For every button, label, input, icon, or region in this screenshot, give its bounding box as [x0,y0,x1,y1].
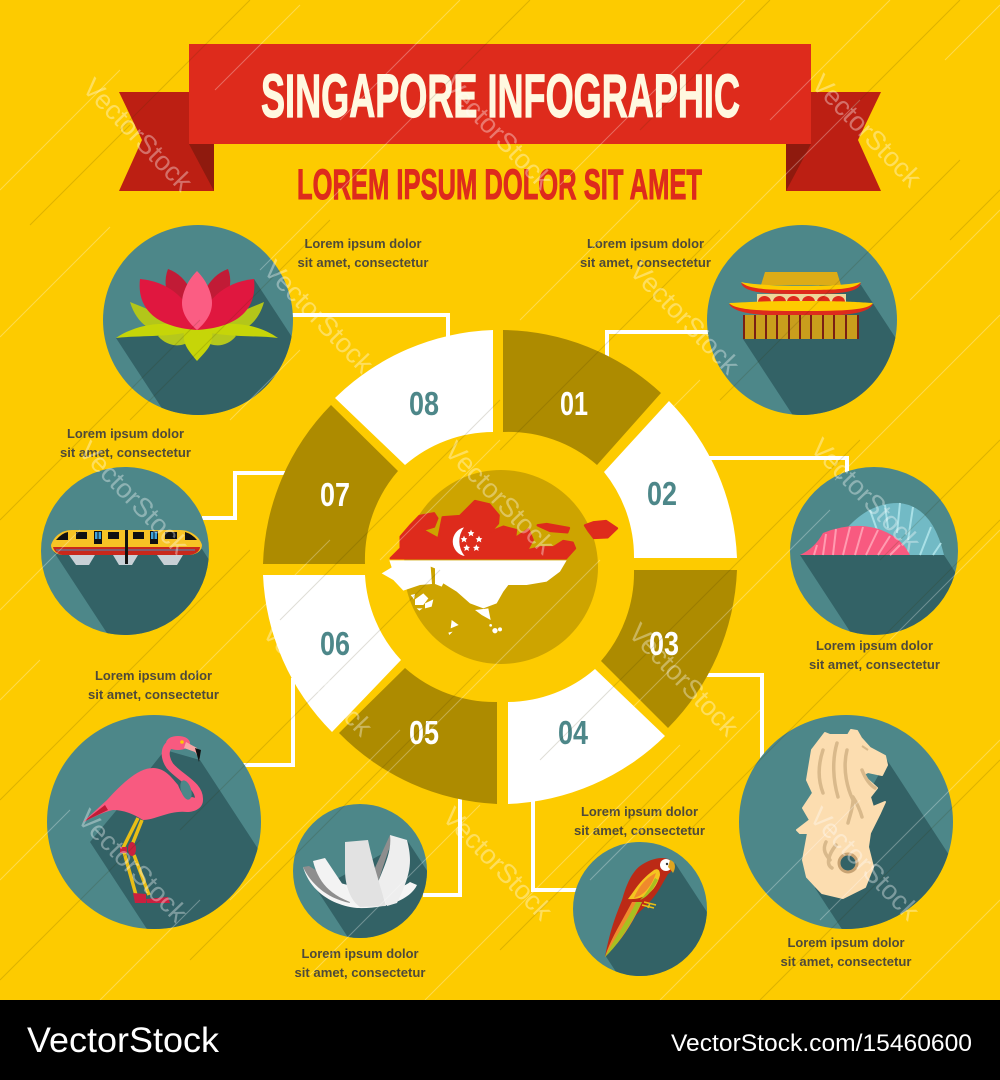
segment 08: 08 [409,385,439,422]
icon: merlion [739,715,953,929]
map: crescent and stars [453,527,465,556]
segment 07: 07 [320,476,350,513]
icon: art science museum [293,804,427,938]
segment 04 [508,669,665,804]
title ribbon [119,44,881,191]
icon: esplanade shells [790,467,958,635]
map: flag red half [391,501,617,558]
text: block 03: sit amet, consectetur [780,955,912,969]
watermarks: VectorStock [805,433,927,557]
text: block 05 [294,947,426,980]
watermarks: VectorStock [439,436,561,560]
footer bar: VectorStock [27,1021,220,1060]
watermarks: VectorStock [73,436,195,560]
segment 04: 04 [558,714,589,751]
watermarks: VectorStock [806,69,928,193]
watermarks: VectorStock [437,71,559,195]
icon: parrot [573,842,707,976]
icon: flamingo [47,715,261,929]
segment 03: 03 [649,625,679,662]
watermarks: VectorStock [623,618,745,742]
connector lines [202,315,847,895]
watermarks: VectorStock [257,618,379,742]
text: block 08 [298,237,429,270]
center map of Singapore [382,470,617,664]
segment 08 [335,330,493,465]
map: flag white half [382,527,567,635]
segment 03 [601,570,737,728]
text: block 08: Lorem ipsum dolor [304,237,422,251]
segment 01: 01 [560,385,588,422]
watermarks: VectorStock [437,802,559,926]
segment 01 [503,330,661,465]
text: block 04: Lorem ipsum dolor [581,805,698,819]
text: block 04 [574,805,705,838]
segment 06: 06 [320,625,350,662]
watermarks: VectorStock [72,804,194,928]
segment 05: 05 [409,714,439,751]
icon: temple [707,225,897,415]
watermarks: VectorStock [804,802,926,926]
segment 02 [604,401,737,558]
text: block 07: sit amet, consectetur [60,446,191,460]
text: block 05: Lorem ipsum dolor [302,947,419,961]
ring chart [263,330,737,804]
text: block 07 [60,427,191,460]
text: block 01: sit amet, consectetur [580,256,711,270]
watermarks: VectorStock [624,256,746,380]
text: block 06: sit amet, consectetur [88,688,219,702]
text: block 08: sit amet, consectetur [298,256,429,270]
text: block 02: Lorem ipsum dolor [816,639,933,653]
text: block 01: Lorem ipsum dolor [587,237,704,251]
segment 02: 02 [647,475,677,512]
text: block 04: sit amet, consectetur [574,824,705,838]
text: block 02 [809,639,940,672]
subtitle: LOREM IPSUM DOLOR SIT AMET [297,161,702,209]
text: block 02: sit amet, consectetur [809,658,940,672]
watermarks [72,69,928,928]
watermarks: VectorStock [77,73,199,197]
icon: lotus [103,225,293,415]
text: block 03: Lorem ipsum dolor [788,936,905,950]
segment 05 [339,668,497,804]
text: block 06 [88,669,219,702]
text: block 07: Lorem ipsum dolor [67,427,184,441]
icon: monorail train [41,467,209,635]
text: block 01 [580,237,711,270]
text: block 06: Lorem ipsum dolor [95,669,212,683]
segment 06 [263,575,401,732]
watermarks: VectorStock [258,255,380,379]
footer bar: VectorStock.com/15460600 [671,1030,972,1057]
segment 07 [263,405,398,564]
footer bar [0,1000,1000,1080]
text: block 05: sit amet, consectetur [294,966,426,980]
text: block 03 [780,936,912,969]
